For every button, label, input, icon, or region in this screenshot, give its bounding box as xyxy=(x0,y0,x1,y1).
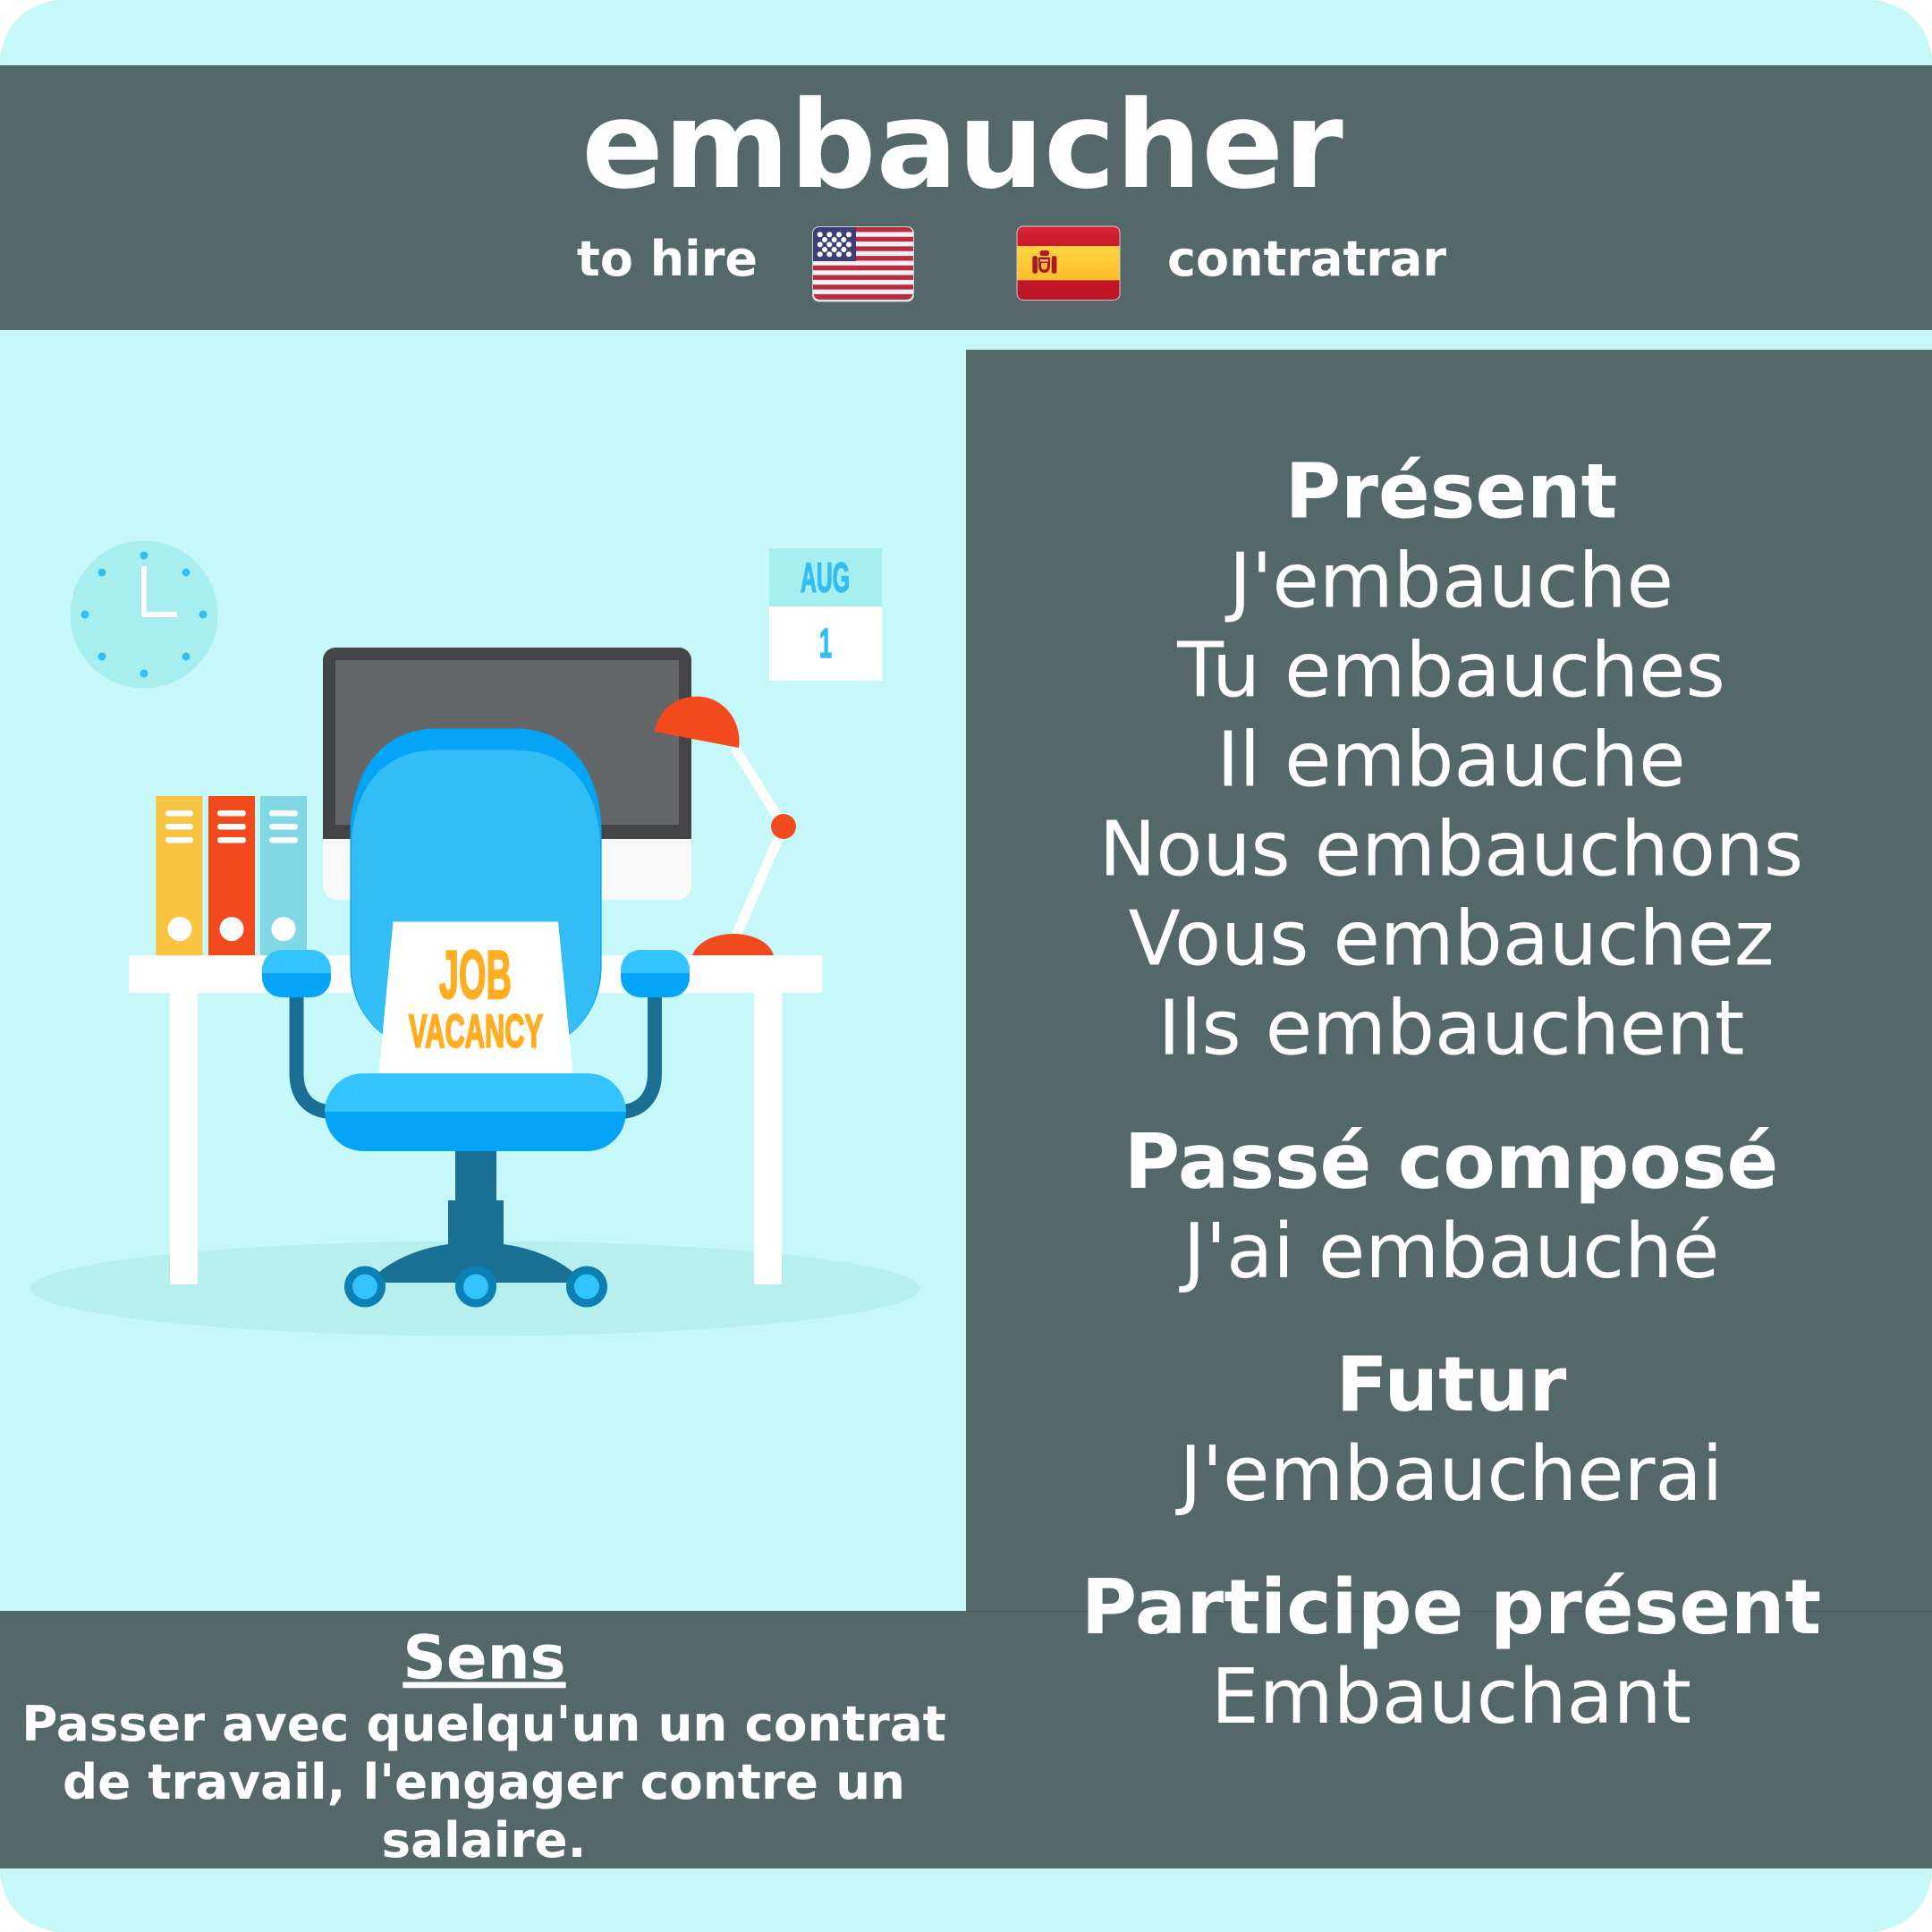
icon: binders xyxy=(156,796,307,955)
heading: sens: Sens xyxy=(402,1623,566,1692)
present tense: Ils embauchent xyxy=(1158,984,1744,1073)
definition text xyxy=(21,1695,946,1868)
panel: illustration xyxy=(30,540,919,1336)
futur: J'embaucherai xyxy=(1175,1430,1723,1519)
passe compose: J'ai embauché xyxy=(1179,1208,1719,1296)
chair arms xyxy=(262,950,690,1112)
icon: US flag xyxy=(812,227,914,301)
present tense: Vous embauchez xyxy=(1128,894,1775,984)
chair seat xyxy=(325,1073,626,1151)
passe compose xyxy=(1124,1118,1778,1296)
spanish translation: contratrar xyxy=(1167,231,1446,287)
icon: calendar: 1 xyxy=(819,620,832,666)
passe compose: Passé composé xyxy=(1124,1118,1778,1207)
futur xyxy=(1175,1341,1723,1519)
present tense: Tu embauches xyxy=(1176,626,1725,716)
present tense: Présent xyxy=(1285,447,1617,537)
definition text: de travail, l'engager contre un xyxy=(63,1753,905,1810)
icon: lamp xyxy=(655,697,796,955)
icon: clock xyxy=(70,540,218,689)
icon: desk xyxy=(129,955,822,1284)
icon: Spanish flag xyxy=(1017,226,1120,301)
participe present xyxy=(1081,1563,1821,1741)
chair back xyxy=(351,729,602,1051)
participe present: Participe présent xyxy=(1081,1563,1821,1652)
present tense: Nous embauchons xyxy=(1099,805,1803,894)
present tense: Il embauche xyxy=(1216,716,1686,805)
present tense: J'embauche xyxy=(1224,537,1674,626)
icon: monitor xyxy=(323,648,691,900)
title: embaucher xyxy=(581,75,1343,216)
chair base xyxy=(344,1145,607,1308)
english translation: to hire xyxy=(577,231,758,287)
present tense xyxy=(1099,447,1803,1073)
job vacancy sign: JOB xyxy=(439,937,512,1013)
participe present: Embauchant xyxy=(1211,1653,1691,1741)
job vacancy sign xyxy=(379,921,572,1073)
panel: conjugations xyxy=(966,350,1932,1868)
panel: meaning xyxy=(0,1611,966,1868)
definition text: salaire. xyxy=(382,1811,586,1868)
icon: calendar: AUG xyxy=(801,555,850,601)
definition text: Passer avec quelqu'un un contrat xyxy=(21,1695,946,1752)
floor shadow xyxy=(30,1241,919,1336)
icon: office chair xyxy=(262,729,690,1308)
job vacancy sign: VACANCY xyxy=(409,1005,543,1057)
panel: header xyxy=(0,65,1932,330)
futur: Futur xyxy=(1336,1341,1566,1429)
icon: calendar xyxy=(769,548,882,681)
